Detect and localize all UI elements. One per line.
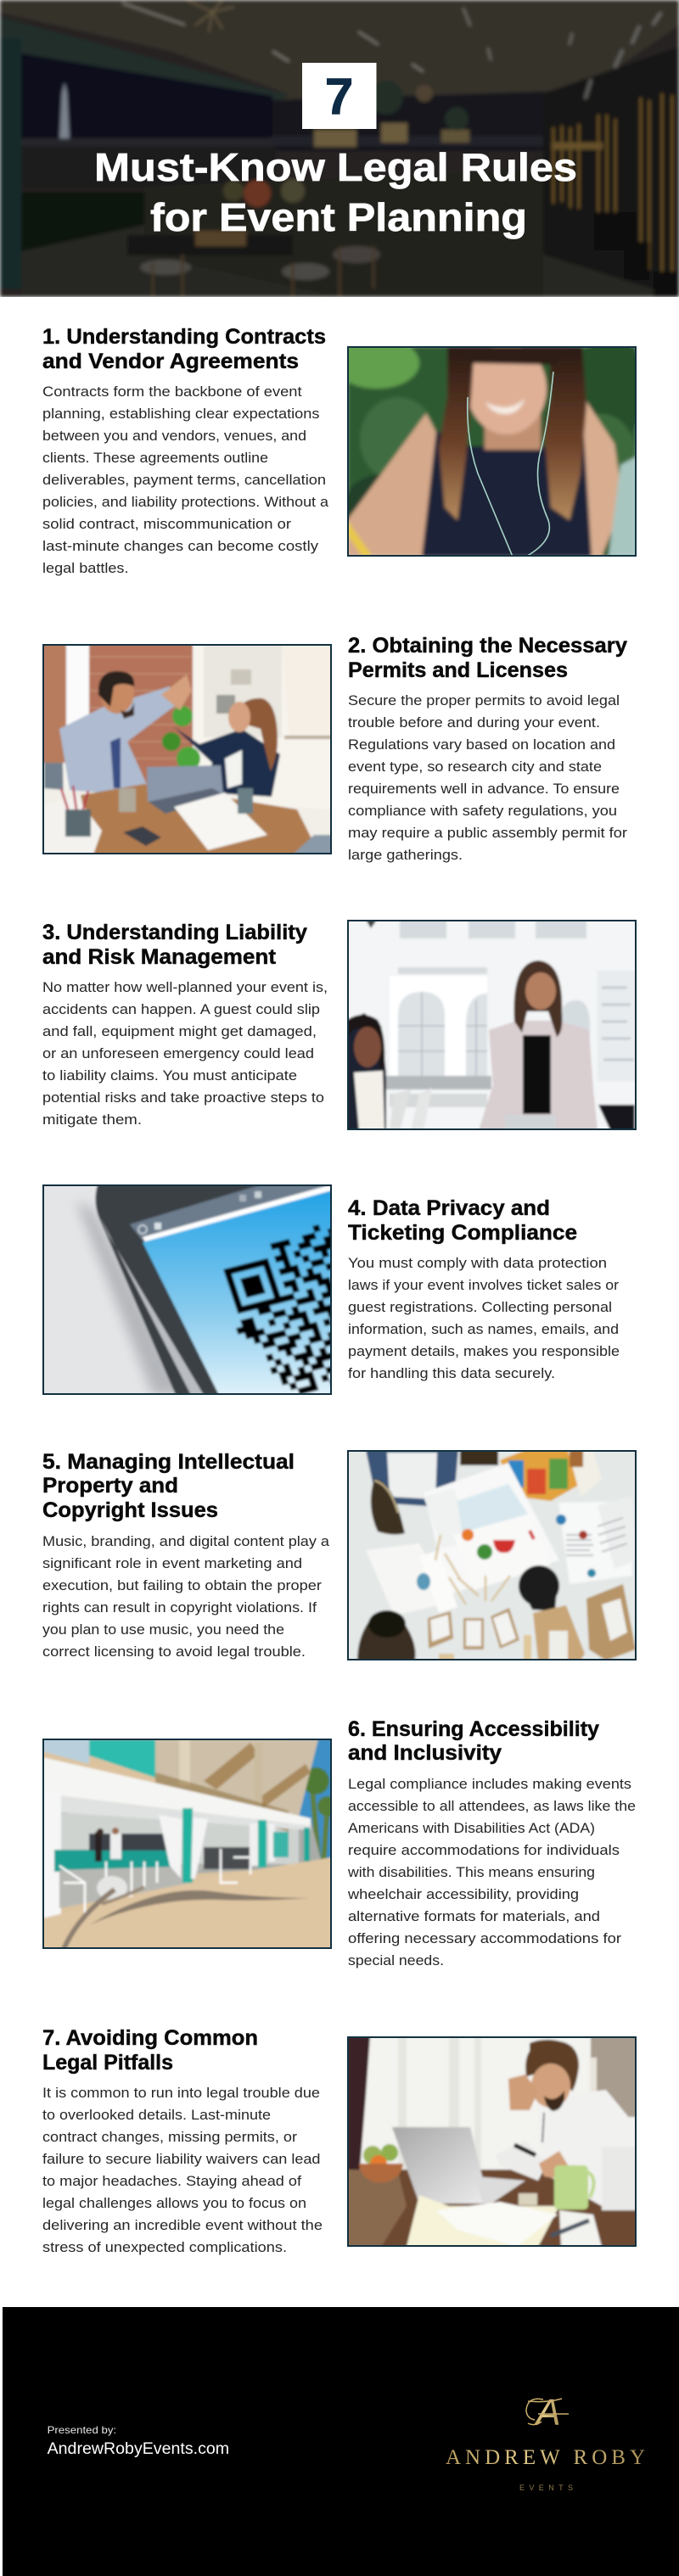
text block: rule 7: failure to secure liability waivers can lead <box>42 2151 321 2167</box>
text block: rule 2: event type, so research city and state <box>348 759 602 775</box>
text block: rule 6: with disabilities. This means ensuring <box>347 1864 595 1880</box>
logo: Andrew Roby Events: ANDREW ROBY <box>446 2446 645 2469</box>
text block: rule 5: execution, but failing to obtain the proper <box>42 1577 322 1593</box>
text block: rule 3 <box>42 979 328 1128</box>
panel: rule 1 contracts <box>42 325 648 576</box>
photo: two businesswomen in bright office <box>349 921 635 1128</box>
text block: rule 4: payment details, makes you responsible <box>348 1343 620 1359</box>
text block: rule 2: may require a public assembly permit for <box>348 825 627 841</box>
text block: rule 7: to major headaches. Staying ahead of <box>42 2173 301 2189</box>
text block: rule 2: large gatherings. <box>348 847 463 863</box>
text block: rule 5 <box>42 1533 330 1660</box>
text block: rule 7: to overlooked details. Last-minute <box>42 2107 271 2123</box>
heading: rule 6 <box>348 1717 599 1765</box>
text block: rule 1: planning, establishing clear expectations <box>42 406 319 422</box>
panel: rule 4 data privacy <box>42 1163 620 1402</box>
heading: rule 4 <box>348 1196 577 1245</box>
text block: rule 7: delivering an incredible event without the <box>42 2217 323 2233</box>
text block: rule 4: information, such as names, emails, and <box>348 1321 619 1337</box>
heading: rule 6: 6. Ensuring Accessibility <box>348 1717 599 1741</box>
text block: rule 5: correct licensing to avoid legal trouble. <box>42 1644 306 1660</box>
heading: rule 3: 3. Understanding Liability <box>42 921 307 944</box>
text block: rule 2: compliance with safety regulations, you <box>348 803 617 819</box>
text block: rule 1: deliverables, payment terms, cancellation <box>42 472 326 488</box>
photo: phone screen with QR code <box>44 1186 330 1393</box>
text block: rule 2: Regulations vary based on location and <box>348 736 615 753</box>
number badge <box>302 63 377 129</box>
text block: rule 4: guest registrations. Collecting personal <box>348 1299 612 1315</box>
logo: Andrew Roby Events: EVENTS <box>519 2484 573 2492</box>
text block: rule 7 <box>42 2085 323 2255</box>
header banner <box>0 0 679 297</box>
heading: rule 5: Copyright Issues <box>42 1498 218 1522</box>
text block: rule 3: accidents can happen. A guest could slip <box>42 1001 320 1017</box>
text block: rule 3: mitigate them. <box>42 1112 142 1128</box>
panel: rule 2 permits <box>42 634 627 863</box>
footer <box>3 2307 679 2576</box>
heading: rule 7: Legal Pitfalls <box>42 2051 173 2075</box>
text block: rule 6: require accommodations for individuals <box>348 1842 620 1858</box>
heading: rule 3: and Risk Management <box>42 945 277 969</box>
text block: rule 3: and fall, equipment might get damaged, <box>42 1023 317 1039</box>
heading: rule 2: Permits and Licenses <box>348 658 568 682</box>
heading: rule 3 <box>42 921 307 969</box>
title: Must-Know Legal Rules <box>94 145 577 189</box>
text block: rule 5: you plan to use music, you need the <box>42 1621 284 1638</box>
text block: rule 3: or an unforeseen emergency could lead <box>42 1045 314 1061</box>
heading: rule 4: 4. Data Privacy and <box>348 1196 550 1220</box>
heading: rule 7: 7. Avoiding Common <box>42 2026 258 2050</box>
text block: rule 1: solid contract, miscommunication or <box>42 516 291 532</box>
text block: rule 2: requirements well in advance. To ensure <box>348 781 620 797</box>
photo: smiling woman with earphones <box>349 348 635 555</box>
presented by text <box>48 2424 229 2458</box>
text block: rule 7: stress of unexpected complications. <box>42 2239 287 2255</box>
panel: rule 5 intellectual property <box>42 1450 637 1660</box>
heading: rule 5 <box>42 1450 295 1522</box>
text block: rule 7: legal challenges allows you to focus on <box>42 2195 306 2211</box>
presented by text: AndrewRobyEvents.com <box>48 2440 229 2458</box>
text block: rule 6: Americans with Disabilities Act (ADA) <box>348 1820 595 1836</box>
text block: rule 6: wheelchair accessibility, providing <box>347 1886 579 1902</box>
text block: rule 6: offering necessary accommodations for <box>348 1930 621 1946</box>
text block: rule 1 <box>42 384 329 576</box>
presented by text: Presented by: <box>48 2424 116 2436</box>
text block: rule 1: between you and vendors, venues, and <box>42 428 306 444</box>
heading: rule 1: and Vendor Agreements <box>42 350 299 373</box>
text block: rule 4: You must comply with data protection <box>348 1255 607 1271</box>
heading: rule 2: 2. Obtaining the Necessary <box>348 634 627 658</box>
text block: rule 4: for handling this data securely. <box>348 1365 555 1381</box>
text block: rule 6: Legal compliance includes making events <box>348 1776 631 1792</box>
logo: Andrew Roby Events: A <box>533 2392 561 2433</box>
text block: rule 2: Secure the proper permits to avoid legal <box>348 692 620 708</box>
text block: rule 1: clients. These agreements outline <box>42 450 268 466</box>
photo: flat lay of printed activity sheets <box>349 1452 635 1659</box>
photo: stressed man at laptop <box>349 2038 635 2245</box>
background photo: rooftop venue at night <box>0 0 679 297</box>
heading: rule 2 <box>348 634 627 682</box>
heading: rule 7 <box>42 2026 258 2075</box>
text block: rule 1: legal battles. <box>42 560 129 576</box>
text block: rule 4: laws if your event involves ticket sales or <box>348 1277 619 1293</box>
title: for Event Planning <box>150 195 527 239</box>
photo: colleagues high five <box>44 646 330 853</box>
text block: rule 2 <box>348 692 627 863</box>
panel: rule 6 accessibility <box>42 1717 636 1968</box>
text block: rule 6: alternative formats for materials, and <box>348 1908 600 1924</box>
heading: rule 5: Property and <box>42 1474 178 1498</box>
text block: rule 1: last-minute changes can become costly <box>42 538 319 554</box>
text block: rule 1: Contracts form the backbone of event <box>42 384 302 400</box>
text block: rule 1: policies, and liability protections. Without a <box>42 494 329 510</box>
heading: rule 5: 5. Managing Intellectual <box>42 1450 295 1474</box>
text block: rule 6: special needs. <box>348 1952 444 1968</box>
text block: rule 5: Music, branding, and digital content play a <box>42 1533 330 1549</box>
text block: rule 2: trouble before and during your event. <box>348 714 600 731</box>
logo: Andrew Roby Events <box>446 2392 645 2492</box>
text block: rule 4 <box>348 1255 620 1381</box>
text block: rule 6: accessible to all attendees, as laws like the <box>348 1798 636 1814</box>
heading: rule 4: Ticketing Compliance <box>348 1221 577 1245</box>
heading: rule 1: 1. Understanding Contracts <box>42 325 326 349</box>
text block: rule 7: It is common to run into legal trouble due <box>42 2085 320 2101</box>
heading: rule 6: and Inclusivity <box>348 1741 502 1765</box>
text block: rule 5: rights can result in copyright violations. If <box>42 1599 317 1616</box>
text block: rule 3: No matter how well-planned your event is, <box>42 979 328 995</box>
heading: rule 1 <box>42 325 326 373</box>
text block: rule 6 <box>347 1776 636 1968</box>
panel: rule 3 liability <box>42 920 637 1130</box>
text block: rule 7: contract changes, missing permits, or <box>42 2129 297 2145</box>
photo: beach venue with teal columns <box>44 1740 330 1947</box>
panel: rule 7 legal pitfalls <box>42 2026 637 2255</box>
title <box>94 145 577 239</box>
text block: rule 5: significant role in event marketing and <box>42 1555 302 1571</box>
text block: rule 3: potential risks and take proactive steps to <box>42 1089 324 1106</box>
number badge: 7 <box>325 68 353 125</box>
text block: rule 3: to liability claims. You must anticipate <box>42 1067 297 1084</box>
